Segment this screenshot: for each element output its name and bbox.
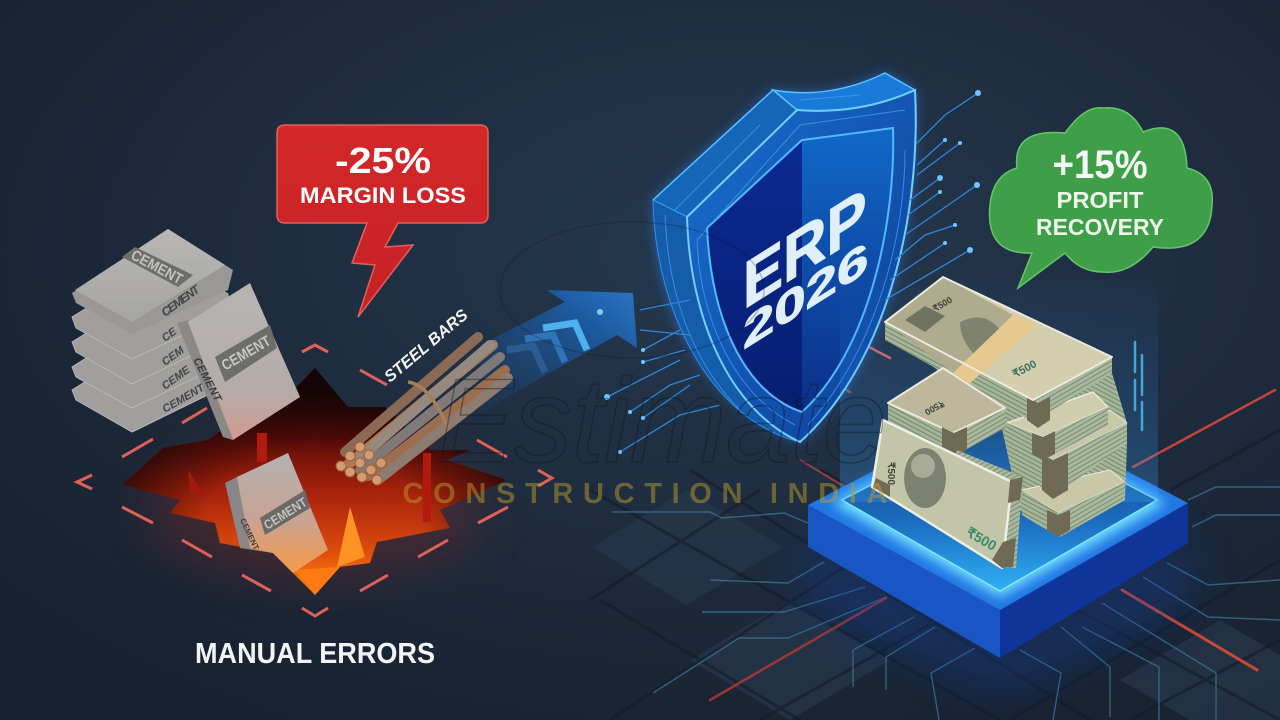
callout: profit recovery [990,108,1212,288]
floor diamond tiles [590,430,1280,720]
watermark: CONSTRUCTION INDIA [402,478,888,510]
bundle: lower back [1007,392,1127,537]
arrow: to ERP shield [480,290,637,412]
icon: leaning cement bag: CEMENT [219,333,274,374]
ERP 2026 label: 2026 [743,232,868,360]
icon: leaning cement bag: CEMENT [190,356,224,405]
panel: manual errors pit [77,345,552,616]
red light streaks [710,328,1275,700]
circuit traces from shield [604,90,981,454]
watermark: Estimate [437,354,887,488]
bundle: top with paper band: ₹500 [1011,358,1039,381]
icon: cement bag stack: CEMENT [128,247,185,288]
icon: falling cement bag [225,453,328,573]
icon: cement bag stack: CE [160,325,180,344]
icon: leaning cement bag [177,283,300,440]
bundle: front standing note [872,420,1023,568]
icon: steel bars bundle [336,306,508,485]
bundle: top with paper band: ₹500 [931,295,954,314]
icon: falling cement bag: CEMENT [238,517,261,552]
heading: manual errors: MANUAL ERRORS [195,638,435,670]
bundle: top with paper band [885,277,1112,428]
icon: rupee bundles [872,277,1127,568]
icon: cement bag stack: CEMENT [159,281,204,319]
lava highlights [122,368,507,595]
panel: glowing platform [808,280,1188,690]
ERP 2026 label: ERP [743,173,867,325]
icon: falling cement bag: CEMENT [261,494,310,533]
bundle: middle left: ₹500 [923,398,946,417]
dashed red boundary [77,345,552,616]
label: steel bars: STEEL BARS [381,306,471,386]
callout: margin loss: MARGIN LOSS [300,183,466,208]
callout: profit recovery: PROFIT [1056,187,1144,213]
bundle mass: back stack [900,340,1127,537]
icon: cement bag stack: CEME [160,364,193,392]
callout: profit recovery: +15% [1052,143,1148,187]
bundle: front standing note: ₹500 [885,462,896,485]
crack pit [122,368,507,595]
watermark [402,222,888,510]
callout: profit recovery: RECOVERY [1036,214,1164,240]
icon: cement bag stack [72,229,233,432]
circuit floor lines [612,487,1280,720]
callout: margin loss: -25% [335,140,431,181]
callout: margin loss [277,125,488,317]
bundle: middle left [888,368,1005,458]
icon: ERP shield [653,73,916,442]
bundle: front standing note: ₹500 [964,524,1000,554]
icon: cement bag stack: CEMENT [160,381,208,416]
icon: cement bag stack: CEM [160,344,187,368]
